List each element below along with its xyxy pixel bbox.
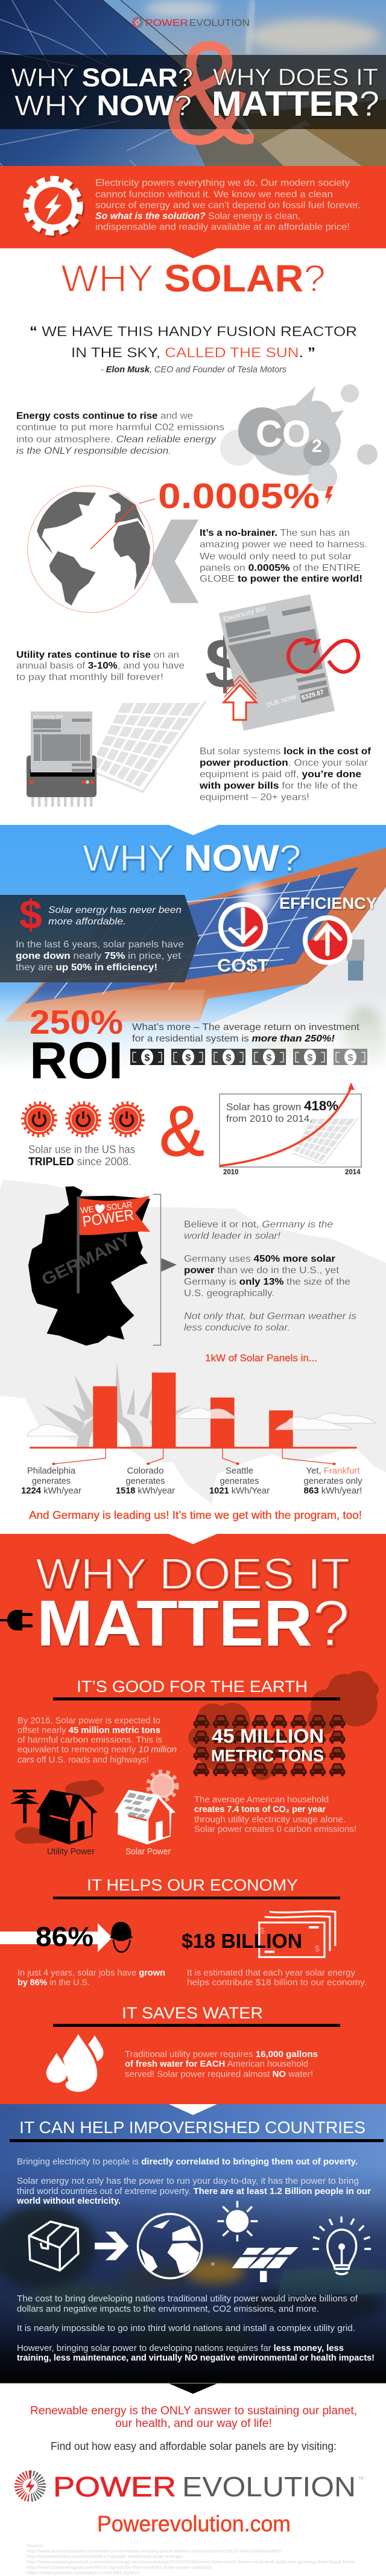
chart title: 1kW of Solar Panels in... (205, 1352, 317, 1364)
icon: cost down (217, 905, 269, 976)
chart labels: Colorado (127, 1466, 164, 1476)
text: no-brainer: amazing power we need to harness. (200, 539, 367, 550)
panel: affordable: more affordable. (48, 917, 126, 927)
icon: CO2 splatter (220, 384, 378, 491)
text: Germany (184, 1220, 356, 1333)
background: US map (0, 1180, 386, 1504)
text: tripled: TRIPLED since 2008. (28, 1156, 131, 1168)
illustration: houses: Utility Power (47, 1847, 95, 1857)
illustration: electricity bill: Electricity Bill (223, 605, 267, 623)
icon: bulb (312, 2216, 371, 2274)
illustration: houses (11, 1772, 177, 1857)
text: Germany: world leader in solar! (184, 1231, 281, 1241)
heading: water: IT SAVES WATER (122, 2004, 263, 2022)
chart: solar growth: Solar has grown 418% (226, 1098, 338, 1113)
ampersand: & (163, 10, 256, 175)
illustration: electricity bill (205, 594, 358, 731)
hero logo: POWER (145, 18, 188, 28)
chart labels: 1518 kWh/year (116, 1486, 175, 1496)
icon group: cars with smoke (188, 1703, 345, 1780)
ampersand: & (159, 1092, 204, 1171)
icon: solar panel (232, 2247, 299, 2282)
heading: water (53, 2004, 340, 2027)
text: tripled: Solar use in the US has (28, 1143, 135, 1156)
logo: EVOLUTION (182, 2471, 356, 2502)
hero logo: EVOLUTION (189, 18, 250, 28)
icon: plug (0, 1610, 33, 1630)
hero title: MATTER? (212, 84, 379, 124)
text: jobs and economy (17, 1968, 367, 1988)
stat: 18 billion: $ (260, 1926, 265, 1935)
chart labels: generates (220, 1477, 259, 1486)
text: lock in: But solar systems lock in the cost of (200, 746, 372, 757)
hero section (0, 0, 386, 193)
text: no-brainer (200, 528, 367, 584)
chart labels: generates only (304, 1477, 362, 1486)
icon: sun behind bars (43, 1362, 191, 1448)
panel: affordable: Solar energy has never been (48, 905, 182, 915)
icon: shredder (27, 711, 96, 807)
chart labels: generates (32, 1477, 71, 1486)
heading: why does it matter: WHY DOES IT (36, 1550, 350, 1598)
text: cost: However, bringing solar power to developing nations requires far less money, less (17, 2344, 344, 2353)
icon row: dollar bills (130, 1049, 367, 1065)
icon: box (29, 2222, 78, 2271)
map: Germany with flag: WE (80, 1204, 95, 1215)
closing text: Find out how easy and affordable solar panels are by visiting: (51, 2440, 337, 2452)
quote: IN THE SKY, CALLED THE SUN . ” (71, 345, 315, 360)
chart: solar growth: from 2010 to 2014. (226, 1114, 312, 1124)
text: lock in: with power bills for the life of the (199, 781, 358, 791)
text: household: The average American household (194, 1795, 329, 1805)
text: water: served! Solar power required almost NO water! (125, 2070, 313, 2079)
text: no-brainer: It’s a no-brainer. The sun has an (200, 528, 350, 538)
sources: https://www.youtube.com/watch?v=wFMkL2QIduY (27, 2570, 140, 2575)
icon: cost down: CO$T (217, 956, 269, 976)
logo: POWER (53, 2471, 176, 2502)
text: energy costs: is the ONLY responsible decision. (16, 446, 171, 456)
text: Germany: Germany is only 13% the size of the (184, 1277, 350, 1287)
text: cost (17, 2294, 375, 2363)
text: poverty: Solar energy not only has the power to run your day-to-day, it has the power to bring (17, 2177, 359, 2186)
chevron (169, 825, 218, 835)
text: cost: It is nearly impossible to go into third world nations and install a complex utility grid. (17, 2324, 355, 2333)
chart labels: Seattle (226, 1466, 253, 1476)
heading: why now: WHY NOW? (83, 838, 301, 879)
intro band (0, 166, 386, 258)
bar chart (27, 1362, 375, 1465)
chart labels: 863 kWh/year! (304, 1486, 362, 1496)
utility pole (11, 1790, 38, 1823)
stat: 0.0005%: 0.0005% (158, 477, 320, 516)
intro text: source of energy and we can’t depend on fossil fuel forever. (95, 200, 361, 211)
text: water: Traditional utility power requires 16,000 gallons (125, 2050, 318, 2059)
text: household (194, 1795, 356, 1834)
chart labels: Philadelphia (27, 1466, 76, 1476)
panel: affordable: In the last 6 years, solar panels have (16, 940, 184, 950)
icon: CO2 splatter: CO (256, 413, 311, 455)
text: Germany: power than we do in the U.S., yet (184, 1265, 340, 1276)
chart: solar growth (220, 1083, 361, 1176)
text: utility rates: Utility rates continue to rise on an (16, 650, 179, 660)
logo (19, 2471, 364, 2502)
icon: CO2 splatter: 2 (312, 436, 322, 456)
text: poverty: world without electricity. (16, 2196, 121, 2206)
icon row: dollar bills: $ (308, 1053, 313, 1063)
icon: efficiency up (279, 894, 377, 962)
text: poverty: Bringing electricity to people is directly correlated to bringing them out of poverty. (17, 2157, 358, 2167)
intro text: indispensable and readily available at an affordable price! (95, 222, 350, 232)
icon: infinity (288, 640, 358, 672)
closing text: our health, and our way of life! (115, 2417, 272, 2430)
heading: economy (53, 1876, 340, 1900)
text: ROI: for a residential system is more than 250%! (132, 1034, 335, 1044)
text: poverty (16, 2157, 371, 2206)
text: water (125, 2050, 318, 2079)
closing text (30, 2404, 357, 2452)
icon: up arrow (224, 676, 256, 720)
stat: 86% (0, 1921, 133, 1952)
heading: why does it matter (36, 1550, 350, 1659)
section: impoverished countries (0, 2104, 386, 2394)
text: jobs and economy: It is estimated that each year solar energy (187, 1968, 356, 1978)
section: why does it matter (0, 1534, 386, 2104)
heading: good for the earth: IT’S GOOD FOR THE EARTH (77, 1678, 308, 1696)
text: offset: cars off U.S. roads and highways! (17, 1755, 149, 1765)
sun (148, 1772, 177, 1800)
text: tripled (28, 1143, 135, 1168)
text: utility rates (16, 650, 185, 682)
panel: affordable: gone down nearly 75% in price, yet (16, 951, 182, 961)
map: Germany with flag: POWER (81, 1206, 135, 1230)
heading: why solar: WHY SOLAR? (61, 258, 326, 300)
icon: arrow (95, 2231, 128, 2260)
text: offset: equivalent to removing nearly 10 million (17, 1745, 177, 1755)
cloud (27, 1425, 79, 1436)
icon group: cars with smoke: METRIC TONS (211, 1746, 324, 1765)
sources: http://www.channelsignal.com/fresh-signals/by-the-numbers-solar-power-statistics (27, 2565, 212, 2570)
icon group: cars with smoke: 45 MILLION (212, 1725, 324, 1747)
sources (27, 2543, 356, 2575)
stat: 18 billion: $ (315, 1944, 320, 1953)
dark title band (0, 55, 386, 129)
heading: good for the earth (53, 1671, 379, 1735)
text: household: through utility electricity usage alone. (194, 1815, 346, 1825)
text: energy costs: Energy costs continue to rise and we (16, 411, 193, 421)
map: Germany with flag: SOLAR (106, 1200, 133, 1212)
icon: shredder: Electricity Bill (33, 714, 63, 719)
logo: TM (358, 2477, 364, 2481)
text: jobs and economy: helps contribute $18 billion to our economy. (187, 1978, 367, 1988)
text: Germany: Believe it or not, Germany is the (184, 1220, 333, 1230)
connectors (54, 1449, 334, 1464)
bars (30, 1373, 357, 1449)
text: Germany: Germany uses 450% more solar (184, 1254, 335, 1264)
quote: “ WE HAVE THIS HANDY FUSION REACTOR (30, 323, 357, 339)
quote: - Elon Musk, CEO and Founder of Tesla Motors (101, 365, 286, 375)
icon: dollar: $ (19, 892, 42, 938)
text: Germany: U.S. geographically. (184, 1288, 274, 1299)
text: jobs and economy: by 86% in the U.S. (17, 1978, 90, 1988)
icon: earth (138, 2214, 202, 2279)
icon: globe (28, 486, 198, 612)
sources: http://www.businessinsider.com/here-comes-teslas-missing-piece-battery-announcement-2015-4#ixzz3ahAaXMlG (27, 2548, 281, 2554)
section: why now (0, 825, 386, 1090)
map: Germany with flag (28, 1186, 177, 1346)
quote (30, 323, 357, 375)
smoke clouds (14, 1779, 104, 1844)
illustration: electricity bill: $329.87 (301, 689, 324, 702)
icon row: box, arrow, globe, sun, panel, bulb (29, 2201, 371, 2282)
text: energy costs: continue to put more harmful C02 emissions (16, 422, 224, 433)
intro text (95, 178, 361, 232)
text: jobs and economy: In just 4 years, solar jobs have grown (17, 1968, 165, 1978)
icon row: power suns (23, 1103, 142, 1136)
sources: http://cleantechnica.com/2014/09/17/growth-residential-solar-energy/ (27, 2554, 183, 2559)
hero title (11, 63, 379, 124)
icon: water drops (46, 2034, 103, 2092)
text: no-brainer: We would only need to put solar (200, 552, 352, 562)
text: Germany: less conducive to solar. (184, 1323, 290, 1333)
text: Germany: Not only that, but German weather is (184, 1311, 356, 1321)
callout: Germany is leading: And Germany is leading us! It’s time we get with the program, too! (29, 1509, 362, 1521)
illustration: houses: Solar Power (125, 1847, 171, 1857)
icon row: dollar bills: $ (348, 1053, 353, 1063)
text: offset: offset nearly 45 million metric tons (17, 1726, 160, 1735)
text: household: Solar power creates 0 carbon emissions! (194, 1825, 356, 1834)
stat: 250% ROI (30, 1003, 123, 1090)
chart labels: 1224 kWh/year (21, 1486, 81, 1496)
sources: http://www.washingtonpost.com/news/energy-environment/wp/2015/03/09/heres-how-much-faster-wind-and-solar-are-growing-than-fossil-fuels/ (27, 2559, 356, 2565)
text: offset: of harmful carbon emissions. This is (17, 1735, 162, 1745)
icon: efficiency up: EFFICIENCY (279, 894, 377, 912)
intro text: Electricity powers everything we do. Our modern society (95, 178, 350, 188)
text: lock in (199, 746, 372, 803)
intro text: cannot function without it. We know we need a clean (95, 189, 333, 200)
utility house (36, 1790, 97, 1845)
stat: 250% ROI: ROI (30, 1032, 123, 1090)
hero title: WHY NOW ? (14, 89, 192, 121)
text: offset (17, 1716, 177, 1765)
text: utility rates: to pay that monthly bill forever! (16, 672, 163, 682)
text: lock in: equipment is paid off, you’re done (200, 769, 361, 780)
intro text: So what is the solution? Solar energy is clean, (95, 211, 300, 221)
heading: why does it matter: MATTER? (37, 1586, 350, 1659)
text: cost: dollars and negative impacts to the environment, CO2 emissions, and more. (17, 2304, 319, 2314)
text: water: of fresh water for EACH American household (125, 2059, 308, 2069)
stat: 18 billion (182, 1911, 335, 1957)
website: Powerevolution.com (97, 2511, 291, 2536)
illustration: electricity bill: DUE NOW: (266, 693, 299, 709)
illustration: solar panel and shredder (27, 701, 206, 807)
text: offset: By 2016, Solar power is expected to (17, 1716, 160, 1726)
icon row: dollar bills: $ (267, 1053, 272, 1063)
text: lock in: equipment – 20+ years! (200, 792, 309, 803)
clouds over bars (179, 1408, 236, 1419)
icon: dollar sign: $ (205, 624, 245, 704)
panel: affordable: they are up 50% in efficiency! (16, 962, 157, 973)
text: poverty: third world countries out of extreme poverty. There are at least 1.2 Billion people in our (17, 2187, 371, 2196)
panel: affordable (0, 892, 199, 982)
stat: 250% ROI: 250% (30, 1003, 123, 1041)
hero photo background (0, 0, 386, 193)
text: energy costs: into our atmosphere. Clean reliable energy (16, 434, 217, 445)
chart: solar growth: 2014 (345, 1169, 361, 1176)
stat: 18 billion: $18 BILLION (182, 1930, 302, 1952)
text: no-brainer: panels on 0.0005% of the ENTIRE (200, 563, 361, 573)
closing text: Renewable energy is the ONLY answer to sustaining our planet, (30, 2404, 357, 2417)
icon row: dollar bills: $ (226, 1053, 232, 1063)
text: cost: The cost to bring developing nations traditional utility power would involve billions of (17, 2294, 358, 2304)
text: ROI (132, 1022, 360, 1044)
chart labels: Yet, Frankfurt (306, 1466, 359, 1476)
icon row: dollar bills: $ (186, 1053, 191, 1063)
text: utility rates: annual basis of 3-10%, and you have (16, 661, 185, 671)
house photo background (0, 825, 386, 1086)
icon: power gear (26, 179, 82, 235)
icon row: dollar bills: $ (145, 1053, 150, 1063)
icon: sun (226, 2210, 248, 2233)
text: energy costs (16, 411, 224, 456)
text: ROI: What’s more – The average return on investment (132, 1022, 360, 1032)
sources: Sources: (27, 2543, 45, 2548)
icon: hard hat (110, 1922, 133, 1952)
chart: solar growth: 2010 (223, 1169, 239, 1176)
chart labels: generates (125, 1477, 165, 1486)
text: household: creates 7.4 tons of CO₂ per year (194, 1805, 326, 1814)
map: Germany with flag: GERMANY (39, 1230, 134, 1289)
heading: impoverished: IT CAN HELP IMPOVERISHED COUNTRIES (19, 2118, 365, 2137)
stat: 86%: 86% (36, 1921, 93, 1952)
heading: economy: IT HELPS OUR ECONOMY (87, 1876, 298, 1894)
hero logo (133, 18, 250, 28)
hero title: WHY DOES IT (213, 65, 378, 91)
text: cost: training, less maintenance, and virtually NO negative environmental or health impacts! (17, 2353, 375, 2363)
chevron (169, 2384, 217, 2394)
hero title: WHY SOLAR? (11, 63, 193, 92)
text: no-brainer: GLOBE to power the entire world! (200, 574, 362, 584)
solar house (115, 1790, 176, 1845)
chart labels: 1021 kWh/Year (209, 1486, 270, 1496)
text: lock in: power production . Once your solar (200, 758, 369, 768)
chart labels (21, 1466, 362, 1496)
night village photo background (0, 2104, 386, 2384)
